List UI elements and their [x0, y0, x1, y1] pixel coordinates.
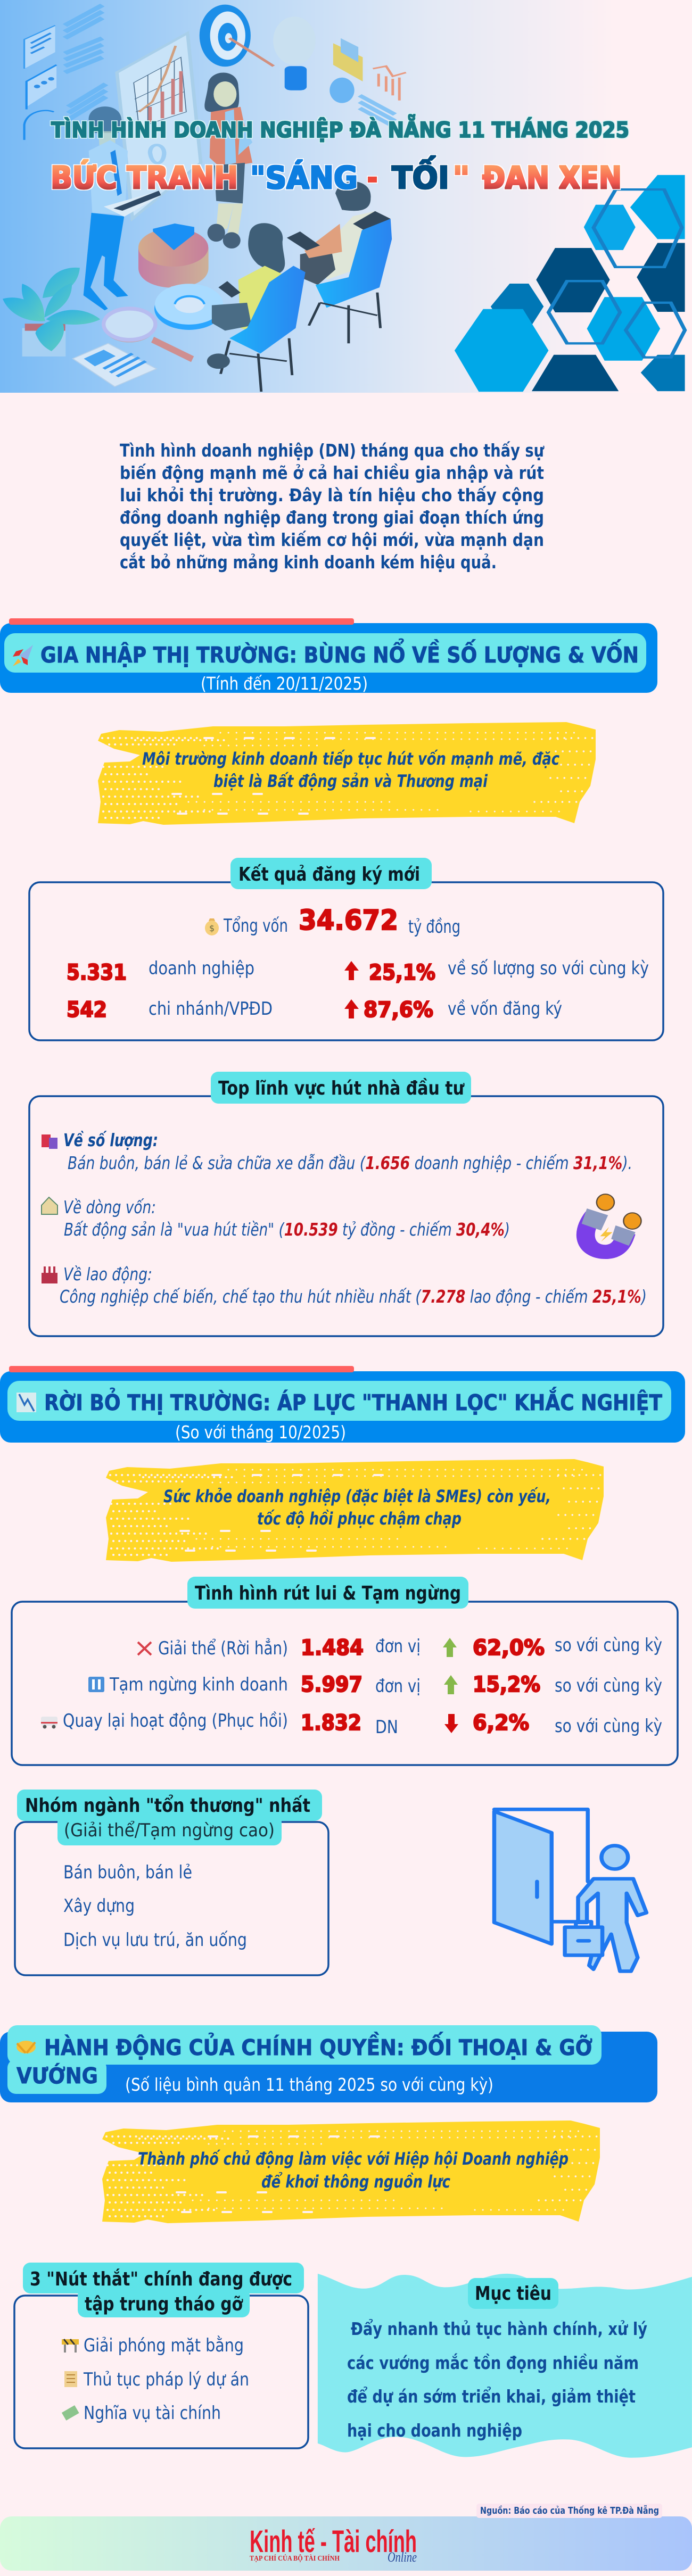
title line 2: TỐI: [392, 155, 449, 196]
3d pie chart: [138, 223, 209, 288]
panel heading: [468, 2278, 558, 2309]
icon: handshake: [17, 2041, 36, 2053]
row: giải thể: 62,0%: [473, 1636, 545, 1660]
row: giải thể: đơn vị: [375, 1636, 421, 1657]
icon: potted plant: [3, 268, 100, 357]
item: về số lượng: Về số lượng:: [63, 1130, 158, 1150]
title line 2: "SÁNG: [250, 159, 358, 196]
panel heading: [187, 1577, 468, 1609]
row: chi nhánh: 542: [67, 998, 107, 1022]
row: tạm ngừng: đơn vị: [375, 1676, 421, 1697]
row: chi nhánh: về vốn đăng ký: [448, 998, 562, 1020]
intro paragraph: cắt bỏ những mảng kinh doanh kém hiệu quả.: [120, 552, 497, 573]
logo: Online: [388, 2549, 417, 2565]
item: về lao động: Về lao động:: [63, 1264, 152, 1285]
row: doanh nghiệp: [67, 958, 649, 985]
panel heading: tập trung tháo gỡ: [85, 2293, 243, 2315]
intro paragraph: [120, 440, 545, 573]
row: quay lại hoạt động: [41, 1710, 662, 1738]
callout: brush 3: để khơi thông nguồn lực: [261, 2172, 450, 2192]
total capital: Tổng vốn: [223, 915, 288, 937]
item: về số lượng: [63, 1130, 632, 1173]
subtitle: (Tính đến 20/11/2025): [201, 673, 368, 694]
icon: envelope: [333, 38, 363, 81]
row: doanh nghiệp: 5.331: [67, 960, 127, 985]
intro paragraph: đồng doanh nghiệp đang trong giai đoạn thích ứng: [120, 507, 544, 528]
panel heading: [230, 858, 432, 889]
subtitle: (So với tháng 10/2025): [175, 1422, 346, 1443]
row: giải thể: 1.484: [301, 1636, 364, 1660]
icon: light bulb: [273, 16, 316, 90]
goal text: hại cho doanh nghiệp: [347, 2420, 522, 2441]
intro paragraph: quyết liệt, vừa tìm kiếm cơ hội mới, vừa mạnh dạn: [120, 529, 544, 550]
logo: TẠP CHÍ CỦA BỘ TÀI CHÍNH: [250, 2554, 340, 2563]
icon: houses: [42, 1197, 57, 1214]
list of sectors: Dịch vụ lưu trú, ăn uống: [63, 1929, 247, 1951]
footer band: [0, 2516, 692, 2571]
total capital: 34.672: [299, 905, 398, 937]
callout: brush 2: tốc độ hồi phục chậm chạp: [257, 1509, 462, 1529]
panel heading: [17, 1790, 322, 1821]
icon: floating document panels: [24, 5, 106, 140]
icon: stripes panel: [360, 95, 395, 127]
list of sectors: Bán buôn, bán lẻ: [63, 1862, 192, 1883]
item: về dòng vốn: Bất động sản là "vua hút tiền" (10.539 tỷ đồng - chiếm 30,4%): [64, 1219, 510, 1240]
panel heading: Top lĩnh vực hút nhà đầu tư: [218, 1078, 465, 1099]
standing man: [84, 106, 161, 310]
row: doanh nghiệp: 25,1%: [369, 960, 435, 985]
item: về lao động: [60, 1264, 647, 1307]
panel heading: Mục tiêu: [475, 2283, 551, 2305]
row: tạm ngừng: 5.997: [301, 1672, 363, 1697]
source note: [476, 2504, 662, 2518]
goal text: để dự án sớm triển khai, giảm thiệt: [347, 2386, 636, 2407]
title line 2: BỨC TRANH: [51, 159, 238, 196]
row: giải thể: [138, 1635, 662, 1660]
callout: brush 1: Môi trường kinh doanh tiếp tục hút vốn mạnh mẽ, đặc: [142, 749, 559, 769]
row: tạm ngừng: Tạm ngừng kinh doanh: [109, 1674, 288, 1695]
title line 2: [51, 155, 622, 196]
logo: [250, 2524, 417, 2565]
panel: 3 nút thắt: [14, 2263, 308, 2448]
callout: brush 3: Thành phố chủ động làm việc với Hiệp hội Doanh nghiệp: [138, 2149, 569, 2169]
section heading: hành động của chính quyền: [0, 2025, 657, 2102]
item: nghĩa vụ tài chính: Nghĩa vụ tài chính: [84, 2403, 221, 2424]
row: giải thể: so với cùng kỳ: [555, 1635, 662, 1656]
panel subheading: (Giải thể/Tạm ngừng cao): [64, 1820, 275, 1841]
row: chi nhánh: chi nhánh/VPĐD: [149, 998, 273, 1020]
row: quay lại hoạt động: 6,2%: [473, 1711, 529, 1735]
row: tạm ngừng: 15,2%: [473, 1672, 540, 1697]
wave background: [318, 2274, 692, 2458]
item: về lao động: Công nghiệp chế biến, chế tạo thu hút nhiều nhất (7.278 lao động - chiếm 25,1%): [60, 1286, 647, 1307]
presentation board with chart: [117, 33, 201, 219]
panel heading: Nhóm ngành "tổn thương" nhất: [25, 1794, 310, 1817]
logo: Kinh tế - Tài chính: [250, 2524, 417, 2559]
icon: gear: [154, 284, 224, 330]
standing woman: [204, 72, 252, 249]
item: về dòng vốn: [63, 1197, 510, 1240]
total capital: tỷ đồng: [408, 916, 460, 938]
row: quay lại hoạt động: Quay lại hoạt động (Phục hồi): [63, 1710, 288, 1732]
illustration: lower left objects and man: [3, 106, 224, 359]
goal text: các vướng mắc tồn đọng nhiều năm: [347, 2353, 639, 2373]
title line 2: ": [452, 160, 470, 196]
icon: shopping bags: [42, 1134, 57, 1149]
callout: brush 1: biệt là Bất động sản và Thương mại: [213, 771, 488, 791]
section heading: hành động của chính quyền: VƯỚNG: [17, 2063, 98, 2089]
panel: tình hình rút lui: [12, 1577, 678, 1765]
icon: report document: [73, 343, 156, 387]
title line 2: -: [367, 160, 377, 196]
item: thủ tục pháp lý: Thủ tục pháp lý dự án: [83, 2369, 249, 2390]
section heading: rời bỏ thị trường: [0, 1366, 685, 1443]
panel heading: 3 "Nút thắt" chính đang được: [30, 2268, 292, 2290]
header banner: [0, 0, 692, 393]
section heading: hành động của chính quyền: HÀNH ĐỘNG CỦA CHÍNH QUYỀN: ĐỐI THOẠI & GỠ: [44, 2032, 592, 2060]
row: tạm ngừng: so với cùng kỳ: [555, 1675, 662, 1696]
panel heading: Tình hình rút lui & Tạm ngừng: [195, 1583, 461, 1604]
row: doanh nghiệp: về số lượng so với cùng kỳ: [448, 958, 649, 979]
subtitle: (Số liệu bình quân 11 tháng 2025 so với cùng kỳ): [125, 2074, 493, 2095]
icon: target: [200, 5, 274, 67]
goal text: [347, 2318, 647, 2441]
row: quay lại hoạt động: so với cùng kỳ: [555, 1716, 662, 1737]
icon: rocket: [13, 645, 33, 666]
icon: money bag: [205, 918, 219, 935]
icon: person leaving door: [494, 1809, 646, 1971]
icon: small bar chart: [373, 66, 406, 101]
row: quay lại hoạt động: DN: [375, 1717, 398, 1738]
panel: nhóm ngành tổn thương: [15, 1790, 328, 1975]
intro paragraph: lui khỏi thị trường. Đây là tín hiệu cho thấy cộng: [120, 485, 544, 506]
title line 2: ĐAN XEN: [482, 160, 622, 196]
item: giải phóng mặt bằng: Giải phóng mặt bằng: [84, 2335, 244, 2356]
list of sectors: Xây dựng: [63, 1895, 135, 1917]
illustration: report document and seated women: [73, 181, 392, 392]
panel heading: Kết quả đăng ký mới: [238, 864, 420, 885]
item: về số lượng: Bán buôn, bán lẻ & sửa chữa xe dẫn đầu (1.656 doanh nghiệp - chiếm 31,1%).: [68, 1153, 632, 1173]
row: quay lại hoạt động: 1.832: [301, 1711, 361, 1735]
icon: chat bubble: [329, 78, 355, 103]
header gradient background: [0, 0, 692, 393]
list of sectors: [63, 1862, 247, 1951]
row: tạm ngừng: [88, 1672, 662, 1697]
illustration: upper icons and standing woman: [24, 5, 406, 249]
total capital: [223, 905, 460, 938]
icon: falling chart: [17, 1393, 36, 1412]
callout: brush 2: Sức khỏe doanh nghiệp (đặc biệt là SMEs) còn yếu,: [163, 1486, 551, 1506]
icon: factory: [42, 1266, 57, 1283]
panel: kết quả đăng ký mới: [29, 858, 663, 1040]
icon: magnet with coins: [582, 1194, 641, 1252]
callout: brush 1: [98, 722, 596, 825]
intro paragraph: Tình hình doanh nghiệp (DN) tháng qua cho thấy sự: [120, 440, 545, 461]
row: chi nhánh: 87,6%: [364, 998, 433, 1022]
item: về dòng vốn: Về dòng vốn:: [63, 1197, 156, 1217]
callout: brush 3: [102, 2121, 600, 2223]
seated woman front: [207, 223, 306, 392]
panel subheading: [57, 1815, 282, 1845]
panel: mục tiêu: [318, 2274, 692, 2458]
seated woman back: [287, 181, 392, 343]
callout: brush 2: [106, 1459, 604, 1562]
row: giải thể: Giải thể (Rời hẳn): [158, 1637, 288, 1659]
row: chi nhánh: [67, 998, 562, 1022]
title line 1: TÌNH HÌNH DOANH NGHIỆP ĐÀ NẴNG 11 THÁNG 2025: [51, 114, 629, 143]
panel heading: [23, 2263, 304, 2317]
icon: money bag: $: [209, 923, 215, 933]
intro paragraph: biến động mạnh mẽ ở cả hai chiều gia nhập và rút: [120, 462, 544, 483]
panel heading: [211, 1072, 471, 1104]
panel: top lĩnh vực: [29, 1072, 663, 1336]
decorative hexagons: [455, 175, 685, 392]
icon: magnifier: [103, 309, 193, 359]
section heading: gia nhập thị trường: [0, 618, 657, 694]
row: doanh nghiệp: doanh nghiệp: [149, 958, 254, 979]
